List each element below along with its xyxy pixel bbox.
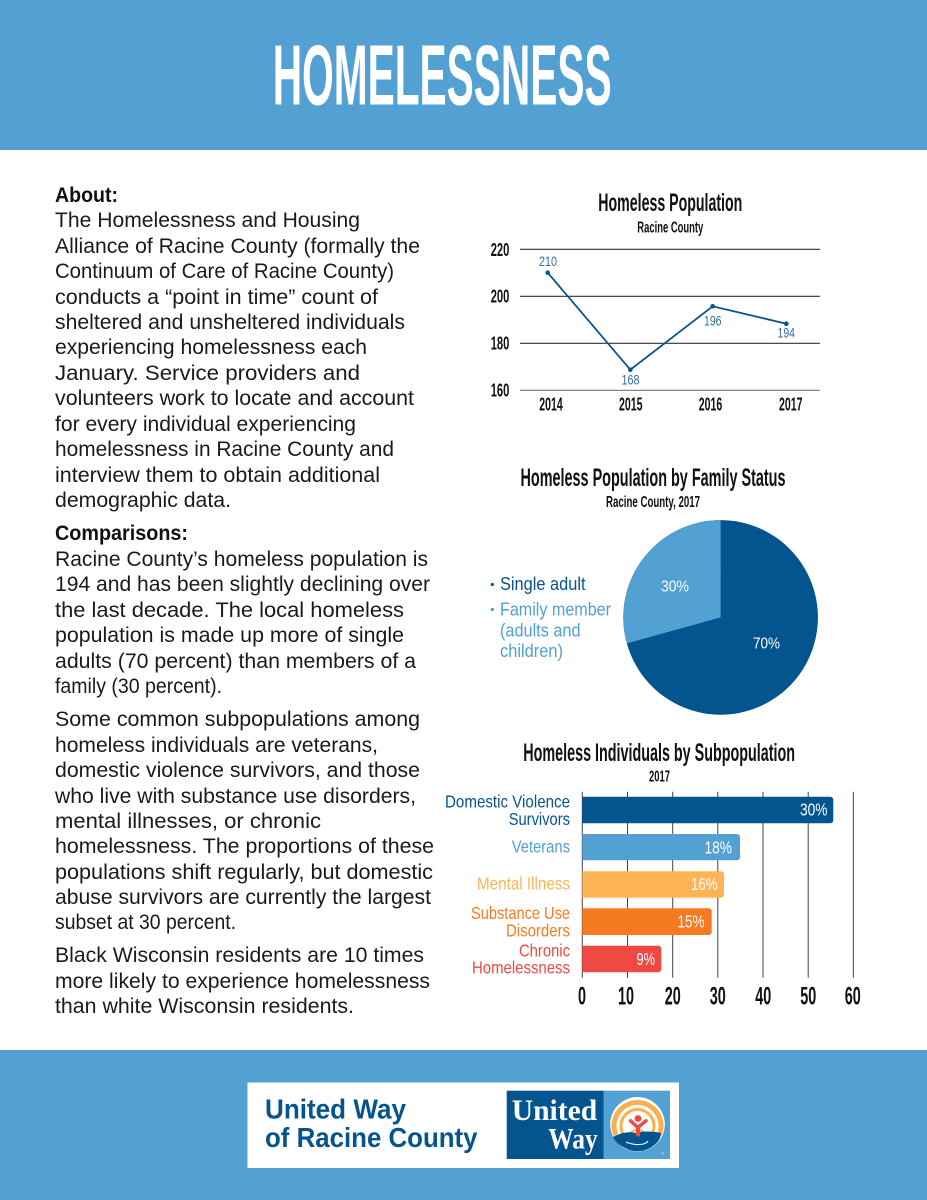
bar chart heading: 2017 <box>649 769 670 786</box>
bar chart: subpopulation: Veterans <box>512 836 570 856</box>
bar chart: subpopulation: Substance Use <box>471 903 570 923</box>
footer banner <box>0 1050 927 1200</box>
data line <box>548 273 786 370</box>
text block: about: interview them to obtain additional <box>55 464 380 487</box>
pie legend: children) <box>500 641 563 661</box>
pie legend: Family member <box>500 600 611 620</box>
line chart heading <box>598 189 742 237</box>
text block: about: January. Service providers and <box>55 362 360 385</box>
text block: subpopulations: domestic violence survivors, and those <box>55 759 420 782</box>
text block: racial disparity <box>55 944 430 1018</box>
bar chart: subpopulation: 0 <box>578 982 586 1010</box>
text block: racial disparity: than white Wisconsin residents. <box>55 995 354 1018</box>
line chart: homeless population: 220 <box>491 239 509 260</box>
pie chart heading <box>520 464 786 511</box>
icon: United Way logo: United <box>512 1094 598 1127</box>
line chart: homeless population: 196 <box>704 313 722 329</box>
bar chart: subpopulation: 20 <box>665 982 681 1010</box>
pie legend: (adults and <box>500 621 580 641</box>
text block: subpopulations: homelessness. The proportions of these <box>55 835 434 858</box>
text block: about: volunteers work to locate and account <box>55 387 414 410</box>
text block: subpopulations <box>54 708 434 934</box>
icon: United Way logo <box>507 1091 670 1159</box>
line chart: homeless population: 2017 <box>779 394 802 415</box>
line chart: homeless population: 180 <box>491 333 509 354</box>
logo wordmark: of Racine County <box>265 1122 478 1153</box>
pie legend: Single adult <box>500 574 586 594</box>
text block: about: homelessness in Racine County and <box>55 438 394 461</box>
text block: subpopulations: subset at 30 percent. <box>55 911 236 934</box>
bar chart: subpopulation: Survivors <box>509 809 570 829</box>
bar chart: subpopulation: 16% <box>691 874 718 894</box>
bar chart: subpopulation: 9% <box>636 949 655 969</box>
text block: subpopulations: Some common subpopulations among <box>55 708 420 731</box>
bar chart: subpopulation: 10 <box>618 982 634 1010</box>
bar chart: subpopulation: 18% <box>704 837 732 857</box>
text block: about: Alliance of Racine County (formally the <box>55 235 420 258</box>
bar chart: subpopulation: Disorders <box>506 920 570 940</box>
text block: comparisons: 194 and has been slightly declining over <box>55 573 430 596</box>
text block: subpopulations: populations shift regularly, but domestic <box>55 861 433 884</box>
text block: racial disparity: more likely to experience homelessness <box>55 970 430 993</box>
bar chart: subpopulation: 60 <box>845 982 861 1010</box>
line chart: homeless population: 200 <box>491 286 509 307</box>
pie chart: family status <box>491 464 818 715</box>
icon: United Way logo: Way <box>548 1122 598 1155</box>
bar chart: subpopulation: 40 <box>755 982 771 1010</box>
text block: subpopulations: mental illnesses, or chronic <box>55 810 321 833</box>
text block: about: demographic data. <box>55 489 231 512</box>
text block: comparisons: adults (70 percent) than members of a <box>55 650 416 673</box>
text block: comparisons: population is made up more of single <box>55 624 404 647</box>
text block: about: experiencing homelessness each <box>55 336 367 359</box>
text block: comparisons: Racine County’s homeless population is <box>55 548 428 571</box>
logo panel <box>248 1082 679 1168</box>
text block: comparisons: family (30 percent). <box>55 675 222 698</box>
text block: about: for every individual experiencing <box>55 413 356 436</box>
line chart: homeless population: 2016 <box>699 394 722 415</box>
text block: about: The Homelessness and Housing <box>55 209 360 232</box>
line chart: homeless population: 168 <box>622 372 640 388</box>
line chart: homeless population: 2014 <box>539 394 563 415</box>
line chart heading: Homeless Population <box>598 189 742 217</box>
text block: about: conducts a “point in time” count of <box>55 286 378 309</box>
text block: subpopulations: homeless individuals are veterans, <box>55 734 378 757</box>
bar chart: subpopulation: Chronic <box>519 940 570 960</box>
pie chart: family status: 70% <box>753 636 780 653</box>
text block: racial disparity: Black Wisconsin residents are 10 times <box>55 944 424 967</box>
pie chart: family status: 30% <box>661 579 689 596</box>
text block: about <box>55 184 420 512</box>
bar chart: subpopulation: 30 <box>710 982 726 1010</box>
line chart: homeless population: 160 <box>491 380 509 401</box>
pie chart heading: Racine County, 2017 <box>606 494 700 511</box>
bar chart: subpopulation: 15% <box>678 912 704 932</box>
text block: subpopulations: who live with substance use disorders, <box>54 785 416 808</box>
text block: comparisons: Comparisons: <box>55 522 188 545</box>
text block: about: About: <box>55 184 118 207</box>
text block: comparisons <box>55 522 430 698</box>
bar chart: subpopulation: Homelessness <box>472 958 570 978</box>
text block: comparisons: the last decade. The local homeless <box>55 599 404 622</box>
line chart heading: Racine County <box>637 220 703 237</box>
line chart: homeless population: 194 <box>778 325 795 341</box>
logo wordmark: United Way <box>265 1094 407 1124</box>
bar chart: subpopulation <box>445 739 861 1010</box>
pie slices <box>623 520 818 715</box>
bar chart: subpopulation: Domestic Violence <box>445 791 570 811</box>
bar chart heading <box>523 739 795 786</box>
logo wordmark <box>265 1094 478 1153</box>
pie legend <box>491 574 611 661</box>
bar chart: subpopulation: 30% <box>800 800 828 820</box>
header banner <box>0 0 927 150</box>
text block: subpopulations: abuse survivors are currently the largest <box>55 886 431 909</box>
text block: about: Continuum of Care of Racine County) <box>55 260 394 283</box>
bar chart: subpopulation: 50 <box>800 982 816 1010</box>
bar chart: subpopulation: Mental Illness <box>477 874 570 894</box>
line chart: homeless population: 210 <box>539 253 557 269</box>
line chart: homeless population <box>491 189 820 415</box>
line chart: homeless population: 2015 <box>619 394 642 415</box>
text block: about: sheltered and unsheltered individuals <box>55 311 405 334</box>
